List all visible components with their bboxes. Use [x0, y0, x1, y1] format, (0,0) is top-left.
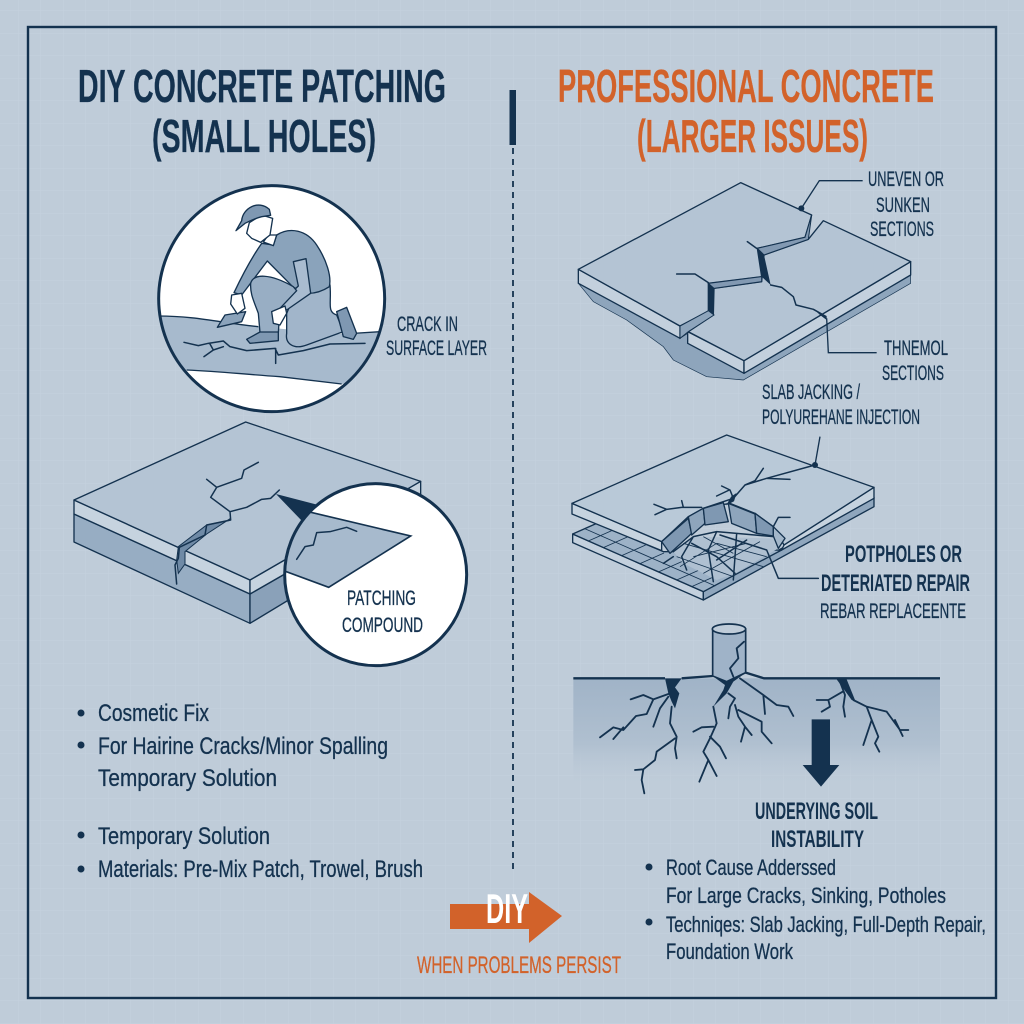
list: DIY features: Cosmetic Fix — [98, 700, 209, 727]
label: slab jacking: SLAB JACKING / — [762, 381, 860, 404]
list: professional features: Foundation Work — [666, 939, 794, 964]
label: crack in surface layer: CRACK IN — [397, 313, 458, 336]
crack interiors — [677, 215, 827, 338]
illustration: worker patching crack in circle — [153, 186, 387, 412]
label: underlying soil instability: UNDERYING SOIL — [755, 798, 878, 825]
slab side faces — [572, 487, 874, 551]
pointer — [276, 494, 318, 521]
label: thermal sections — [882, 337, 948, 385]
slab front faces — [578, 262, 911, 373]
leader: slab jacking — [812, 437, 820, 468]
crack — [175, 462, 279, 584]
front arm — [278, 259, 311, 310]
down arrow — [803, 719, 839, 787]
illustration: pothole slab with rebar — [572, 435, 874, 600]
list: professional features: Root Cause Adderssed — [666, 855, 836, 880]
label: uneven or sunken sections — [868, 168, 944, 241]
head and cap — [236, 205, 277, 246]
list: DIY features: Temporary Solution — [98, 765, 277, 792]
list: DIY features: For Hairine Cracks/Minor Spalling — [98, 733, 388, 760]
illustration: cracked slab with patching compound magnifier — [74, 422, 467, 666]
boots — [247, 307, 357, 343]
soil — [573, 678, 940, 788]
title: DIY concrete patching: DIY CONCRETE PATCHING — [78, 60, 446, 112]
ground line — [573, 673, 940, 678]
torso and arm — [234, 231, 330, 295]
label: potholes and rebar — [820, 541, 970, 623]
title: professional concrete — [558, 60, 934, 162]
label: uneven or sunken sections: SECTIONS — [870, 218, 934, 241]
trowel and hands — [217, 293, 287, 327]
label: uneven or sunken sections: SUNKEN — [876, 194, 930, 217]
soil under slab — [578, 273, 911, 380]
label: uneven or sunken sections: UNEVEN OR — [868, 168, 944, 191]
slab top left piece — [578, 183, 812, 326]
title: DIY concrete patching — [78, 60, 446, 162]
list: DIY features — [78, 700, 423, 883]
slab top — [572, 435, 874, 545]
magnifier — [280, 484, 467, 666]
label: slab jacking — [762, 381, 920, 429]
illustration: soil cracks and column — [573, 624, 940, 793]
soil cracks — [600, 642, 908, 793]
column — [712, 624, 746, 682]
back leg — [286, 285, 343, 347]
slab faces — [74, 481, 421, 623]
label: underlying soil instability — [755, 798, 878, 853]
label: patching compound — [342, 587, 423, 637]
caption: when problems persist: WHEN PROBLEMS PERSIST — [417, 952, 621, 979]
list: professional features — [646, 855, 986, 964]
leader: thermal sections — [827, 318, 877, 353]
ground cracks — [184, 341, 365, 363]
list: professional features: For Large Cracks, Sinking, Potholes — [666, 883, 946, 908]
ground — [153, 316, 387, 384]
broken pieces — [662, 503, 785, 553]
arrow: DIY to professional — [450, 885, 562, 943]
label: patching compound: PATCHING — [347, 587, 416, 610]
slab top — [74, 422, 421, 580]
illustration: uneven slab with sunken sections — [578, 181, 911, 380]
front thigh — [251, 276, 297, 333]
rebar layer — [573, 497, 874, 600]
central divider — [510, 90, 516, 870]
list: DIY features: Materials: Pre-Mix Patch, Trowel, Brush — [98, 856, 423, 883]
list: DIY features: Temporary Solution — [98, 823, 270, 850]
leader: uneven or sunken — [798, 181, 863, 211]
arrow: DIY to professional: DIY — [486, 885, 528, 932]
label: thermal sections: THNEMOL — [884, 337, 948, 360]
slab top right piece — [688, 221, 911, 361]
label: thermal sections: SECTIONS — [882, 362, 944, 385]
label: underlying soil instability: INSTABILITY — [771, 826, 864, 853]
fractures — [654, 465, 818, 582]
label: crack in surface layer — [386, 313, 487, 360]
title: DIY concrete patching: (SMALL HOLES) — [152, 110, 376, 162]
label: patching compound: COMPOUND — [342, 614, 423, 637]
label: crack in surface layer: SURFACE LAYER — [386, 337, 487, 360]
